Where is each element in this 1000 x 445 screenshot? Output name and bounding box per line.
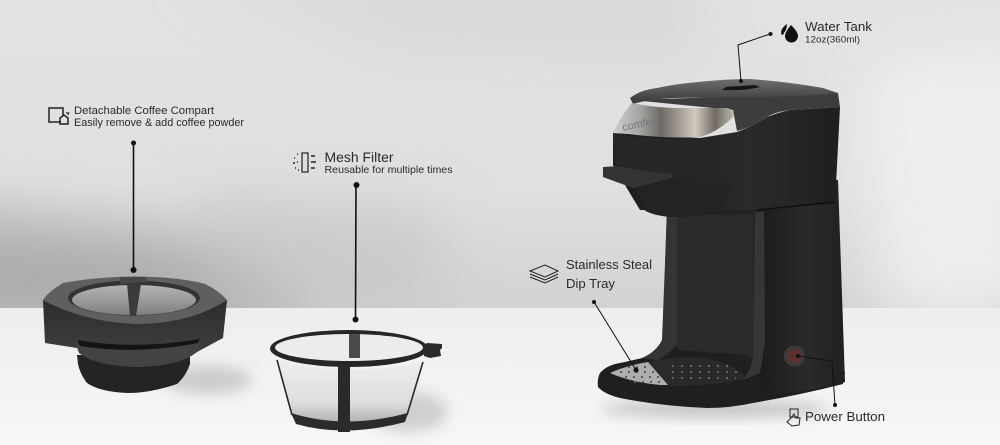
compartment shadow: [164, 366, 252, 394]
wall background: [0, 0, 1000, 330]
pointer line: [130, 140, 136, 273]
column left pillar: [642, 212, 677, 360]
callout: mesh filter: [293, 150, 452, 322]
pointer line: [738, 32, 772, 83]
heading: Water Tank: [805, 19, 873, 34]
icon: stacked plates: [530, 265, 558, 283]
compartment mesh window: [68, 280, 200, 316]
machine shoulder: [633, 93, 840, 131]
callout: power button: [787, 354, 885, 426]
heading: Stainless Steal: [566, 257, 652, 272]
drip tray base: [598, 340, 845, 408]
icon: mesh filter: [293, 153, 316, 172]
coffee compartment on machine: [613, 133, 720, 178]
compartment rim: [43, 276, 227, 324]
callout: water tank: [738, 19, 873, 83]
description: Reusable for multiple times: [324, 164, 452, 176]
icon: compartment: [49, 108, 69, 124]
power button: [784, 346, 805, 366]
body seam: [757, 202, 835, 210]
compartment outer band: [43, 300, 227, 353]
filter basket mesh: [277, 360, 423, 426]
pointer line: [796, 354, 837, 407]
icon: pressing hand: [787, 409, 800, 426]
drip tray grate: [610, 357, 747, 386]
steel front panel: [613, 103, 733, 137]
pointer line: [352, 182, 360, 322]
machine handle: [603, 166, 672, 188]
filter bottom ring: [291, 413, 408, 431]
heading: Mesh Filter: [324, 150, 394, 165]
lid button: [722, 85, 760, 90]
machine floor shadow: [600, 401, 830, 417]
panel: mesh filter: [270, 330, 448, 432]
brand label: comfee: [621, 115, 659, 134]
machine tower: [760, 180, 845, 395]
description: 12oz(360ml): [805, 34, 860, 46]
filter top ring: [270, 330, 428, 367]
panel: detachable coffee compartment: [43, 276, 252, 394]
compartment centre strut: [127, 284, 141, 316]
heading second line: Dip Tray: [566, 276, 616, 291]
machine lid: [630, 79, 838, 104]
machine upper body: [613, 107, 840, 210]
floor: [0, 308, 1000, 445]
heading: Detachable Coffee Compart: [74, 105, 214, 117]
pointer line: [592, 300, 638, 372]
filter back strut: [349, 334, 360, 358]
callout: drip tray: [530, 257, 652, 372]
heading: Power Button: [805, 409, 885, 424]
filter tab: [424, 343, 442, 358]
brew cup: [635, 183, 733, 217]
description: Easily remove & add coffee powder: [74, 117, 244, 129]
compartment top tab: [120, 277, 147, 284]
panel: coffee machine: [598, 79, 845, 417]
column right pillar: [743, 212, 765, 380]
callout: detachable coffee compartment: [49, 105, 244, 273]
filter front strut: [338, 365, 350, 432]
filter shadow: [368, 392, 448, 432]
compartment handle: [77, 339, 200, 367]
icon: water drops: [781, 24, 798, 42]
machine column back: [662, 205, 765, 365]
compartment lower cup: [77, 355, 190, 393]
